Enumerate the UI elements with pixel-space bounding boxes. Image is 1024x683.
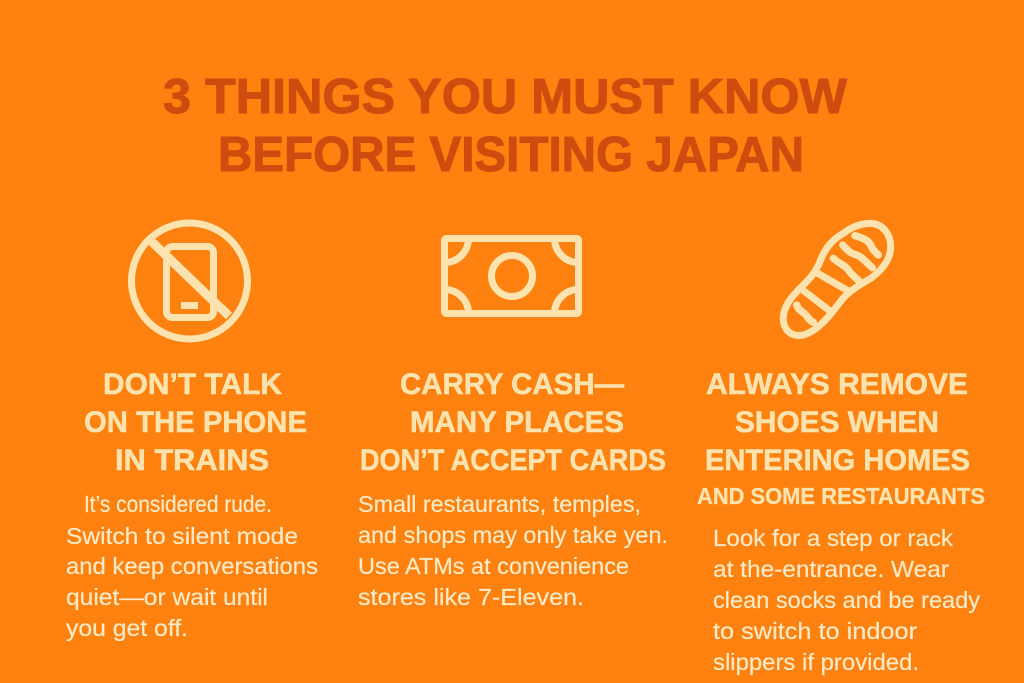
text: phone advice: It’s considered rude.: [84, 491, 272, 517]
icon: banknote: [444, 238, 578, 314]
heading: shoes: ALWAYS REMOVE: [706, 368, 968, 401]
text: shoes advice: Look for a step or rack: [713, 525, 954, 551]
heading: cash: CARRY CASH—: [400, 368, 624, 401]
heading: shoes: ENTERING HOMES: [705, 444, 970, 477]
text: cash advice: [358, 491, 668, 610]
heading: phone: [84, 368, 307, 477]
text: shoes advice: clean socks and be ready: [713, 587, 981, 613]
text: shoes advice: [713, 525, 981, 675]
text: phone advice: quiet—or wait until: [66, 584, 268, 610]
heading: phone: ON THE PHONE: [84, 406, 307, 439]
text: phone advice: you get off.: [66, 615, 188, 641]
text: shoes advice: at the-entrance. Wear: [713, 556, 949, 582]
text: cash advice: Use ATMs at convenience: [358, 553, 629, 579]
heading: shoes: AND SOME RESTAURANTS: [697, 483, 985, 509]
icon: shoe sole: [783, 223, 891, 335]
panel: carry cash: [358, 238, 668, 610]
text: shoes advice: slippers if provided.: [713, 649, 919, 675]
text: shoes advice: to switch to indoor: [713, 618, 917, 644]
heading: phone: IN TRAINS: [115, 444, 269, 477]
title: 3 THINGS YOU MUST KNOW: [163, 70, 848, 124]
title: BEFORE VISITING JAPAN: [218, 128, 804, 182]
text: phone advice: [66, 491, 318, 641]
heading: cash: MANY PLACES: [410, 406, 624, 439]
text: cash advice: and shops may only take yen.: [358, 522, 668, 548]
text: cash advice: stores like 7-Eleven.: [358, 584, 584, 610]
icon: no phone: [132, 223, 248, 339]
heading: shoes: SHOES WHEN: [735, 406, 939, 439]
text: phone advice: and keep conversations: [66, 553, 318, 579]
panel: remove shoes: [697, 223, 985, 675]
text: phone advice: Switch to silent mode: [66, 523, 298, 549]
heading: cash: DON’T ACCEPT CARDS: [360, 444, 666, 477]
heading: phone: DON’T TALK: [103, 368, 282, 401]
heading: shoes: [697, 368, 985, 509]
panel: phone etiquette: [66, 223, 318, 641]
title: [163, 70, 848, 182]
heading: cash: [360, 368, 666, 477]
text: cash advice: Small restaurants, temples,: [358, 491, 641, 517]
